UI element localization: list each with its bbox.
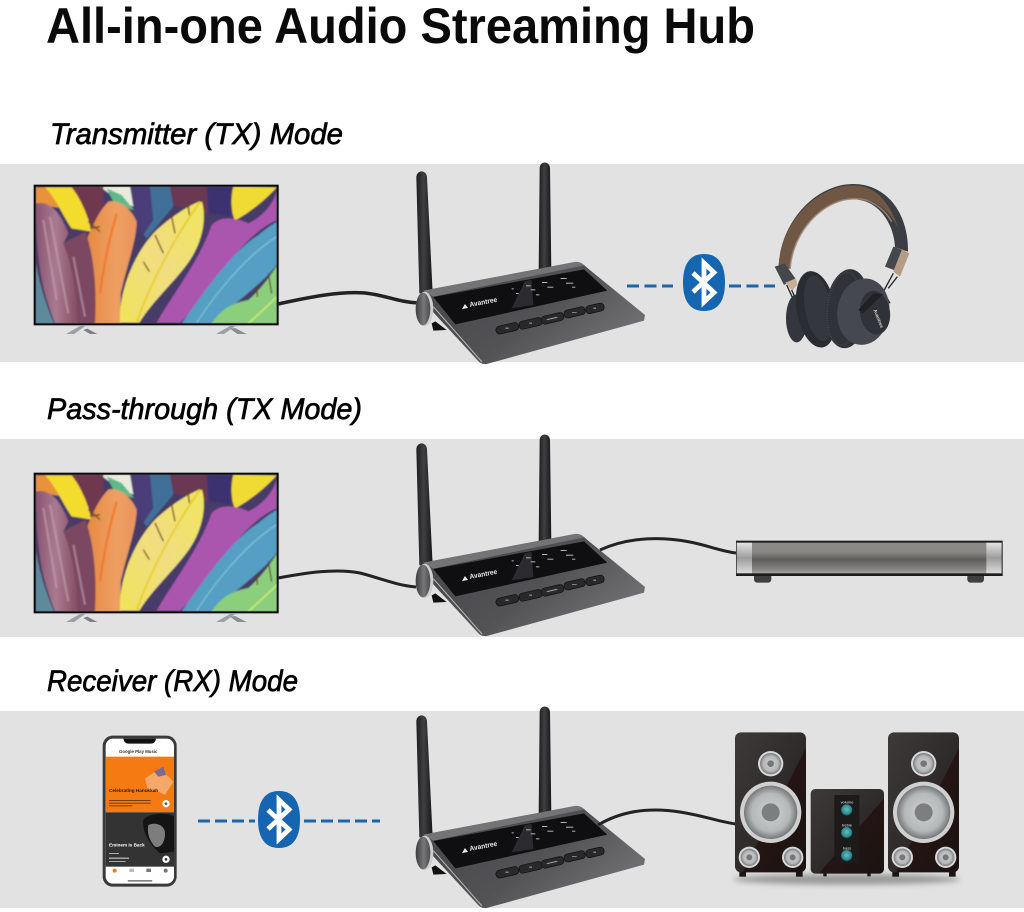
center control unit: treble <box>842 822 853 827</box>
icon: Bluetooth <box>258 791 300 848</box>
center control unit: volume <box>841 800 854 805</box>
panel: receiver mode <box>0 706 1024 908</box>
device: Avantree hub <box>416 434 645 636</box>
device: speaker system <box>733 732 960 885</box>
cable: TV to hub <box>278 293 418 304</box>
device: smartphone: Celebrating Hanukkah <box>109 788 158 793</box>
device: soundbar <box>736 541 1003 583</box>
center control unit <box>811 789 884 876</box>
device: smartphone: Google Play Music <box>119 749 158 754</box>
connector: dashed line to headphones <box>729 284 775 288</box>
device: Avantree hub <box>416 162 645 364</box>
heading: pass-through mode: Pass-through (TX Mode) <box>47 393 362 426</box>
device: Avantree hub: Avantree <box>469 569 498 581</box>
device: Avantree hub <box>416 706 645 908</box>
center control unit: bass <box>843 845 851 850</box>
panel: transmitter mode <box>0 162 1024 364</box>
heading: receiver mode: Receiver (RX) Mode <box>47 665 298 698</box>
device: headphones: Avantree <box>872 309 885 329</box>
icon: Bluetooth <box>683 254 725 311</box>
cable: hub to soundbar <box>600 539 736 553</box>
icon: television <box>35 186 278 334</box>
right speaker <box>888 732 959 877</box>
device: Avantree hub: Avantree <box>469 297 498 309</box>
cable: hub to speakers <box>598 810 736 825</box>
device: Avantree hub: Avantree <box>469 841 498 853</box>
icon: television <box>35 474 278 622</box>
heading: transmitter mode: Transmitter (TX) Mode <box>50 118 343 151</box>
device: smartphone: Eminem is Back <box>109 843 145 848</box>
device: headphones <box>775 184 909 351</box>
device: smartphone <box>103 736 177 887</box>
connector: dashed line from phone <box>198 820 255 822</box>
left speaker <box>735 732 806 877</box>
connector: dashed line to hub <box>304 820 380 822</box>
cable: TV to hub <box>278 571 416 587</box>
panel: pass-through mode <box>0 434 1024 637</box>
connector: dashed line to Bluetooth <box>627 284 673 288</box>
